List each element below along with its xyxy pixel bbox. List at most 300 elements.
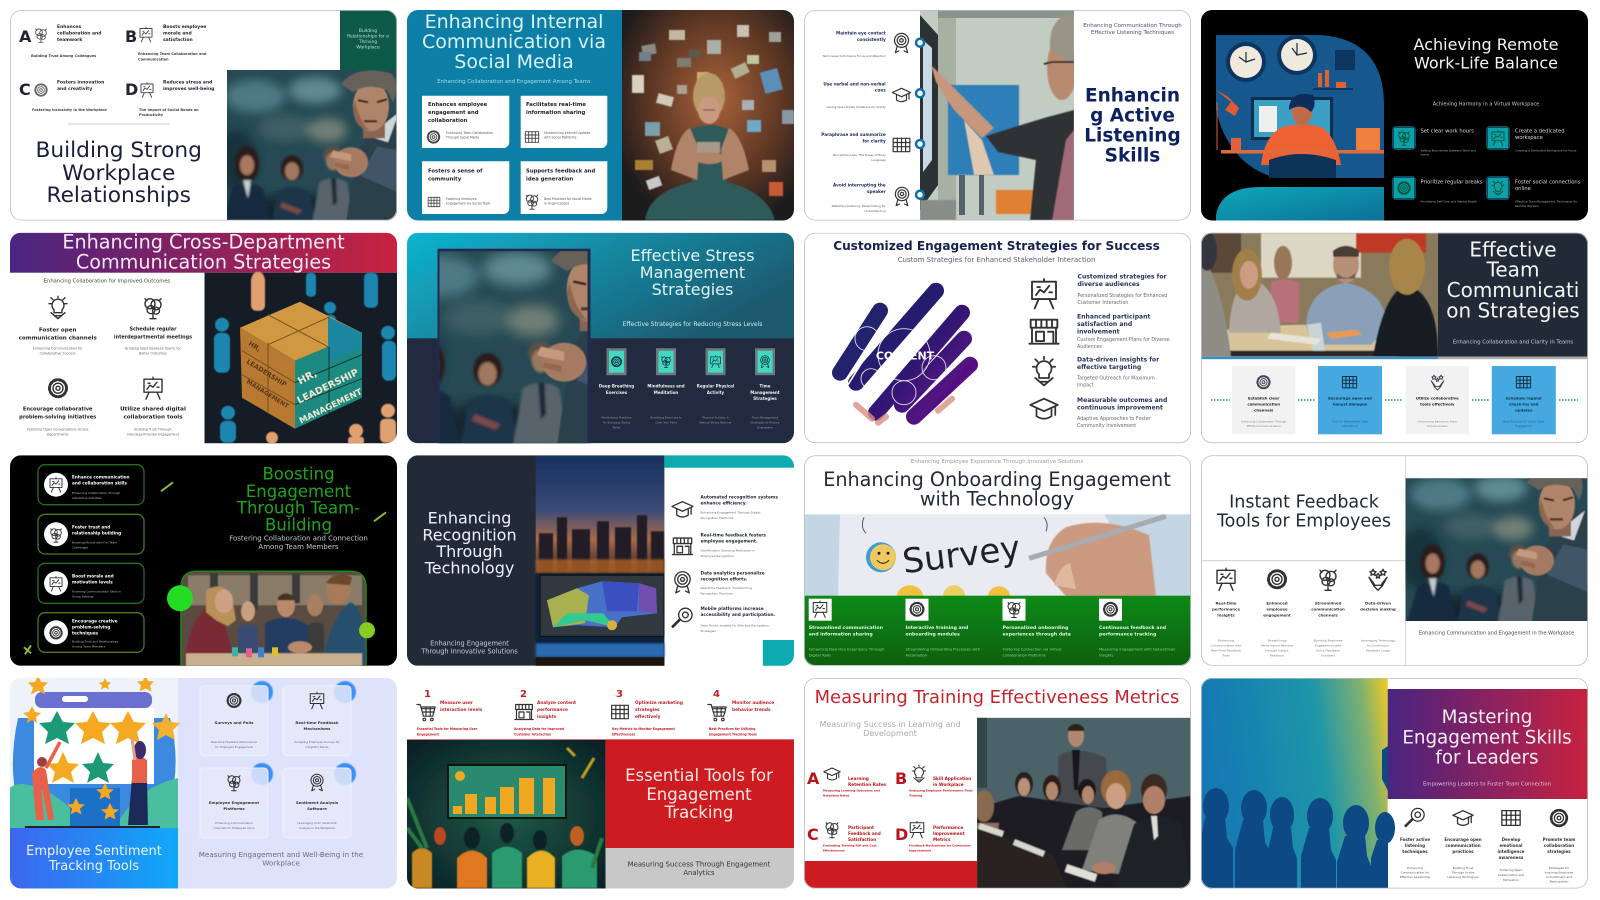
- title: Team: [1486, 258, 1539, 282]
- step 1: consistently: [857, 37, 886, 42]
- item: regular meetings: interdepartmental meetings: [114, 335, 192, 341]
- metric B: Training: [909, 794, 922, 798]
- metric 4: Engagement Tracking Tools: [709, 732, 757, 736]
- panel: Enhancing Active Listening Skills: [804, 10, 1191, 221]
- card: real-time feedback: Mechanisms: [303, 726, 331, 731]
- metric 2: [514, 689, 576, 736]
- item B: Boosts employee: [163, 24, 206, 30]
- metric 3: Key Metrics to Monitor Engagement: [612, 727, 675, 731]
- photo: leadership cube and figures: [204, 272, 398, 445]
- strategy: time management: Strategies: [753, 396, 777, 401]
- metric 1: [417, 689, 483, 736]
- item: morale: [38, 563, 144, 603]
- item: automated recognition: Recognition Platforms: [700, 516, 734, 520]
- metric 3: Optimize marketing: [635, 700, 683, 706]
- item: automated recognition: Enhancing Engagement Through Digital: [700, 510, 761, 514]
- metric 1: 1: [424, 689, 431, 700]
- metric 1: Engagement: [417, 732, 439, 736]
- item: social connections: Foster social connections: [1515, 180, 1581, 186]
- item A: A: [19, 27, 32, 46]
- metric C: C: [807, 825, 819, 844]
- item: participant satisfaction: involvement: [1077, 329, 1120, 336]
- step 3: for clarity: [862, 138, 886, 143]
- green tag: [340, 10, 397, 70]
- item: shared digital tools: Utilize shared digital: [120, 407, 186, 413]
- item: data analytics: [675, 570, 765, 595]
- subtitle: Workplace: [262, 858, 300, 868]
- item: problem solving: problem-solving: [72, 624, 110, 629]
- panel: Mastering Engagement Skills for Leaders: [1199, 678, 1588, 889]
- item: mobile platforms: Strategies: [700, 629, 716, 633]
- title: Building: [265, 515, 332, 534]
- column: streamlined communication: and information sharing: [809, 631, 873, 637]
- photo: leadership cube and figures: LEADERSHIP: [245, 358, 288, 389]
- strategy: breathing: Relief: [613, 426, 621, 430]
- item: social connections: Remote Workers: [1515, 204, 1539, 208]
- item: regular meetings: Schedule regular: [130, 327, 177, 333]
- skill: emotional intelligence: Fostering Team: [1500, 868, 1522, 872]
- decorative green dashes: [24, 482, 386, 654]
- column: continuous feedback: Insights: [1099, 653, 1113, 657]
- metric B: [895, 765, 974, 798]
- panel: Employee Sentiment Tracking Tools: [10, 675, 397, 889]
- item: automated recognition: [672, 494, 778, 520]
- item: shared digital tools: Building Trust Through: [134, 428, 172, 432]
- item: problem solving: Among Team Members: [72, 644, 106, 648]
- step box 3: Utilize collaborative: [1416, 396, 1459, 401]
- item: data analytics: Data analytics personalize: [700, 570, 765, 576]
- teal shape: [1216, 187, 1384, 221]
- card: sentiment analysis: Analysis in the Workplace: [299, 826, 335, 830]
- photo: leadership cube and figures: HR,: [247, 340, 262, 353]
- column: employee engagement: through Instant: [1265, 648, 1289, 652]
- metric A: Retention Rates: [823, 794, 850, 798]
- item: shared digital tools: collaboration tools: [123, 415, 183, 421]
- strategy: breathing: Mindfulness Practices: [601, 416, 632, 420]
- metric 2: Analyze content: [537, 700, 576, 706]
- subtitle: Development: [863, 729, 917, 738]
- skill: emotional intelligence: Develop: [1502, 837, 1520, 842]
- green tag: Workplace: [356, 44, 380, 50]
- title: Achieving Remote: [1414, 35, 1558, 54]
- card: sentiment analysis: [283, 768, 351, 838]
- photo: team building: [181, 571, 366, 666]
- item: communication: Enhancing Collaboration Through: [72, 491, 120, 495]
- column: employee engagement: Feedback: [1270, 653, 1284, 657]
- item: mobile platforms: Mobile platforms increase: [700, 606, 764, 612]
- metric D: Improvement: [909, 848, 931, 852]
- subtitle: Effective Strategies for Reducing Stress Levels: [623, 321, 762, 328]
- step box 4: [1492, 366, 1556, 434]
- item: open channels: Foster open: [39, 328, 76, 334]
- metric 3: 3: [616, 689, 623, 700]
- item B: satisfaction: [163, 37, 193, 43]
- item C: [19, 80, 107, 112]
- item: customized strategies: Customer Interaction: [1078, 300, 1128, 306]
- item: participant satisfaction: [1029, 314, 1170, 350]
- subtitle: Measuring Success in Learning and: [819, 720, 961, 729]
- strategy: time management: Time Management: [751, 416, 779, 420]
- item: workspace: workspace: [1515, 135, 1543, 141]
- item B: morale and: [163, 30, 192, 36]
- title: Work-Life Balance: [1414, 54, 1558, 72]
- item D: [125, 80, 214, 117]
- column: streamlined communication: Streamlined communication: [809, 625, 883, 631]
- strategy: mindfulness: Calm Your Mind: [655, 421, 677, 425]
- metric 4: Best Practices for Utilizing: [709, 727, 755, 731]
- item: regular meetings: Bridging Gaps Between Teams for: [125, 347, 182, 351]
- item: work hours: [1392, 126, 1476, 157]
- column: data-driven decisions: Feedback Loops: [1366, 648, 1390, 652]
- item: shared digital tools: Interdepartmental Engagement: [127, 433, 180, 437]
- column: personalized onboarding: Collaboration Platforms: [1002, 653, 1046, 657]
- item: automated recognition: Automated recognition systems: [700, 494, 778, 500]
- purple title panel: [1388, 689, 1588, 799]
- skill: open communication: practices: [1452, 849, 1474, 854]
- title: Relationships: [46, 183, 191, 208]
- skill: active listening: Enhancing: [1407, 866, 1423, 870]
- item: morale: Boost morale and: [72, 573, 114, 578]
- step box 4: Engagement: [1515, 424, 1532, 428]
- metric A: A: [807, 769, 820, 788]
- card: community: community: [428, 176, 462, 182]
- skill: team collaboration: collaboration: [1544, 843, 1574, 848]
- item: collaborative problem solving: [19, 380, 96, 437]
- title: Enhancin: [1085, 86, 1180, 106]
- column: communication channels: Solutions: [1321, 653, 1335, 657]
- step box 4: check-ins and: [1509, 402, 1539, 407]
- header band: [10, 233, 397, 273]
- step box 3: tools effectively: [1420, 402, 1455, 407]
- column: data-driven decisions: for Continuous: [1367, 643, 1389, 647]
- title: Effective: [1469, 238, 1557, 262]
- gradient background with silhouettes: [1199, 678, 1395, 889]
- item C: and creativity: [57, 86, 92, 92]
- metric 4: behavior trends: [732, 707, 771, 713]
- metric 3: effectively: [635, 714, 661, 720]
- subtitle: Measuring Engagement and Well-Being in the: [199, 850, 364, 859]
- title: Enhancing: [428, 508, 511, 527]
- photo: team meeting: [1201, 232, 1438, 357]
- item: breaks: Prioritizing Self-Care and Mental Health: [1420, 200, 1477, 204]
- card: sharing: [521, 96, 607, 148]
- panel: Customized Engagement Strategies for Success: [804, 233, 1191, 443]
- column: personalized onboarding: Personalized onboarding: [1002, 625, 1068, 631]
- item: communication: and collaboration skills: [72, 480, 127, 485]
- strategy: time management: [750, 348, 780, 430]
- skill: active listening: Communication for: [1401, 870, 1430, 874]
- item: measurable outcomes: continuous improvement: [1077, 405, 1163, 412]
- item: communication: Enhance communication: [72, 474, 130, 479]
- step box 1: communication: [1247, 402, 1280, 407]
- strategy: time management: Time: [760, 384, 771, 389]
- photo: woman with tablet among floating images: [622, 10, 794, 220]
- strategy: physical activity: Activity: [707, 390, 725, 395]
- title: on Strategies: [1446, 299, 1580, 323]
- item: social connections: online: [1515, 186, 1531, 192]
- item: collaborative problem solving: Departments: [47, 433, 69, 437]
- title: Communication Strategies: [76, 251, 331, 274]
- title: Instant Feedback: [1229, 492, 1380, 512]
- metric D: Improvement: [933, 831, 965, 836]
- item: trust: Foster trust and: [72, 524, 110, 529]
- item: work hours: Home: [1420, 153, 1429, 157]
- item: participant satisfaction: Enhanced participant: [1077, 314, 1151, 321]
- title: Strategies: [652, 280, 733, 299]
- subtitle: Analytics: [683, 869, 715, 877]
- metric 1: interaction levels: [440, 707, 483, 713]
- column: continuous feedback: Continuous feedback and: [1099, 625, 1166, 631]
- column: performance insights: Tools: [1221, 653, 1230, 657]
- column: streamlined communication: [809, 599, 885, 657]
- step box 1: Establish clear: [1248, 396, 1280, 401]
- skill: open communication: Building Trust: [1453, 866, 1474, 870]
- item: work hours: Set clear work hours: [1420, 129, 1474, 135]
- item: data-driven insights: [1033, 357, 1159, 389]
- item D: Reduces stress and: [163, 80, 212, 86]
- blue title band: [10, 828, 178, 889]
- green tag: Thriving: [358, 39, 377, 45]
- teal corner square: [763, 640, 795, 666]
- blue circles: [251, 681, 356, 785]
- panel: Enhancing Cross-Department Communication Strategies: [10, 231, 398, 445]
- step box 1: [1232, 366, 1295, 434]
- item: regular meetings: Better Outcomes: [139, 352, 167, 356]
- red title panel: [606, 740, 795, 848]
- step 3: [821, 132, 910, 162]
- item: mobile platforms: Data-Driven Insights for Effective Recognition: [700, 623, 769, 627]
- subtitle: Effective Listening Techniques: [1091, 30, 1174, 36]
- skill: team collaboration: Participation: [1550, 880, 1568, 884]
- step 4: Avoid interrupting the: [833, 183, 886, 188]
- item: real-time feedback: Gamification: Boosting Motivation in: [700, 548, 755, 552]
- item: participant satisfaction: satisfaction and: [1077, 321, 1132, 328]
- title: Workplace: [62, 161, 175, 186]
- item: mobile platforms: [672, 606, 776, 633]
- panel: Enhancing Recognition Through Technology: [407, 455, 795, 666]
- item: trust: relationship building: [72, 530, 121, 535]
- connectors: [1211, 399, 1578, 401]
- metric C: [807, 823, 881, 852]
- graphic: diagonal content stripes: CONTENT: [876, 350, 935, 363]
- card: engagement platforms: Channels for Employee Voice: [214, 826, 255, 830]
- column: performance insights: Enhancing: [1218, 638, 1234, 642]
- card: sentiment analysis: Leveraging AI for Sentiment: [297, 821, 338, 825]
- illustration: star ratings and people: [10, 675, 180, 828]
- title: Effective Stress: [630, 246, 755, 265]
- item: communication: [38, 465, 144, 505]
- card: engagement: Enhancing Team Collaboration: [446, 131, 493, 135]
- item: data analytics: Recognition Practices: [700, 591, 733, 595]
- strategy: physical activity: Regular Physical: [697, 384, 735, 389]
- title: Technology: [424, 558, 514, 577]
- item: shared digital tools: [120, 377, 186, 437]
- title: g Active: [1090, 106, 1175, 126]
- card: community: Fostering Employee: [446, 197, 477, 201]
- step box 4: Best Practices for Virtual Team: [1503, 420, 1545, 424]
- column: communication channels: Streamlined: [1315, 600, 1342, 605]
- card: real-time feedback: Insightful Trends: [305, 745, 329, 749]
- skill: team collaboration: Promote team: [1543, 837, 1575, 842]
- strategy: time management: Overwhelm: [757, 426, 773, 430]
- card: feedback: [521, 161, 607, 214]
- column: communication channels: [1311, 570, 1345, 657]
- subtitle: Enhancing Engagement: [430, 639, 509, 647]
- column: streamlined communication: Digital Tools: [809, 653, 831, 657]
- item C: C: [19, 80, 31, 99]
- item: mobile platforms: accessibility and participation.: [700, 612, 776, 618]
- item: measurable outcomes: [1030, 397, 1167, 429]
- step box 4: Schedule regular: [1506, 396, 1542, 401]
- step box 2: Interactions: [1342, 424, 1359, 428]
- step 2: [823, 82, 911, 109]
- item D: improves well-being: [163, 86, 214, 92]
- item: customized strategies: diverse audiences: [1078, 281, 1140, 288]
- photo: leadership cube and figures: MANAGEMENT: [245, 378, 291, 411]
- skill: open communication: [1444, 811, 1482, 879]
- panel: Achieving Remote Work-Life Balance: [1201, 10, 1588, 221]
- column: employee engagement: Enhanced: [1266, 600, 1288, 605]
- item: workspace: Creating a Dedicated Workspace for Focus: [1515, 148, 1577, 152]
- item: measurable outcomes: Adaptive Approaches to Foster: [1077, 416, 1151, 422]
- column: continuous feedback: performance tracking: [1099, 631, 1156, 637]
- title: Through Team-: [236, 498, 360, 517]
- item: real-time feedback: Real-time feedback fosters: [700, 532, 766, 538]
- strategy: breathing: Exercises: [606, 390, 628, 395]
- column: performance insights: insights: [1217, 612, 1235, 617]
- step box 4: updates: [1515, 408, 1533, 413]
- metric 3: [612, 689, 683, 736]
- card: surveys and polls: for Employee Engagement: [215, 745, 254, 749]
- skill: emotional intelligence: Collaboration and: [1498, 873, 1524, 877]
- card: engagement platforms: Employee Engagement: [209, 800, 259, 805]
- subtitle: Custom Strategies for Enhanced Stakeholder Interaction: [898, 256, 1095, 264]
- column: data-driven decisions: Data-driven: [1365, 600, 1391, 605]
- column: performance insights: [1211, 568, 1242, 657]
- illustration: audience watching bar chart: [407, 740, 606, 889]
- title: Boosting: [262, 464, 335, 483]
- card: engagement: Through Social Media: [445, 136, 479, 140]
- item: open channels: Enhancing Communication for: [33, 347, 83, 351]
- column: streamlined communication: Enhancing New Hire Experience Through: [809, 647, 885, 651]
- metric D: [895, 821, 971, 852]
- step box 2: [1318, 366, 1382, 434]
- subtitle: Fostering Collaboration and Connection: [229, 534, 368, 542]
- card: sharing: Facilitates real-time: [526, 102, 586, 108]
- step 4: [832, 183, 909, 213]
- step 4: Understanding: [864, 209, 886, 213]
- item A: Building Trust Among Colleagues: [31, 54, 96, 58]
- item: customized strategies: [1032, 274, 1167, 308]
- step box 3: Overcoming Barriers to Team: [1418, 420, 1457, 424]
- metric 2: insights: [537, 714, 557, 720]
- card: community: [422, 161, 509, 214]
- strategy: time management: Strategies to Reduce: [750, 421, 780, 425]
- column: interactive training: Automation: [906, 653, 928, 657]
- skill: team collaboration: [1543, 810, 1575, 884]
- step box 3: Communication: [1427, 424, 1448, 428]
- title: Listening: [1084, 126, 1181, 146]
- subtitle: Enhancing Communication Through: [1083, 23, 1182, 29]
- column: personalized onboarding: [1002, 599, 1071, 657]
- item D: D: [125, 80, 138, 99]
- title: Tracking: [664, 803, 733, 822]
- step 2: Use verbal and non-verbal: [823, 82, 886, 86]
- graphic: diagonal content stripes: [840, 291, 970, 423]
- item: collaborative problem solving: Fostering Open Conversations Across: [27, 428, 89, 432]
- subtitle: Measuring Success Through Engagement: [628, 860, 771, 868]
- column: communication channels: channels: [1318, 612, 1338, 617]
- item: regular meetings: [114, 299, 192, 356]
- item: customized strategies: Personalized Strategies for Enhanced: [1078, 293, 1167, 299]
- metric C: Satisfaction: [848, 837, 876, 842]
- panel: Building Strong Workplace Relationships: [10, 10, 397, 220]
- caption: Enhancing Communication and Engagement in the Workplace: [1419, 630, 1574, 636]
- item D: The Impact of Social Bonds on: [139, 108, 199, 112]
- green tag: Building: [359, 28, 377, 34]
- item: open channels: [19, 296, 97, 356]
- card: engagement platforms: Enhancing Communication: [215, 821, 253, 825]
- photo: survey and pen: Survey: [900, 528, 1022, 582]
- step 3: Language: [871, 158, 886, 162]
- title: Tools for Employees: [1216, 511, 1391, 531]
- metric 3: strategies: [635, 707, 660, 713]
- item: workspace: Create a dedicated: [1515, 129, 1564, 135]
- strategy: breathing: [599, 348, 634, 430]
- column: data-driven decisions: Leveraging Technology: [1361, 638, 1395, 642]
- title: Employee Sentiment: [26, 844, 162, 859]
- subtitle: Enhancing Collaboration for Improved Outcomes: [44, 279, 171, 285]
- item C: Fostering Inclusivity in the Workplace: [32, 108, 107, 112]
- step box 2: honest dialogue: [1333, 402, 1368, 407]
- title: Enhancing Internal: [425, 11, 603, 33]
- card: surveys and polls: Real-time Feedback Mechanisms: [211, 740, 257, 744]
- teal top bar: [664, 455, 794, 468]
- item: participant satisfaction: Audiences: [1077, 344, 1102, 350]
- panel: Essential Tools for Engagement Tracking: [407, 678, 795, 889]
- column: personalized onboarding: experiences through data: [1002, 631, 1071, 637]
- item A: collaboration and: [57, 30, 101, 36]
- metric C: Effectiveness: [823, 848, 845, 852]
- panel: Measuring Training Effectiveness Metrics: [804, 678, 1191, 889]
- item: communication: Interactive Activities: [72, 496, 102, 500]
- item: measurable outcomes: Community Involvement: [1077, 423, 1136, 429]
- column: employee engagement: Performance Reviews: [1261, 643, 1294, 647]
- item C: Fosters innovation: [57, 80, 104, 86]
- strategy: mindfulness: Breathing Exercises to: [650, 416, 682, 420]
- item: social connections: Effective Time Management Techniques for: [1515, 200, 1578, 204]
- metric 4: 4: [713, 689, 720, 700]
- metric 4: Monitor audience: [732, 700, 774, 706]
- item D: Productivity: [139, 113, 164, 117]
- item: social connections: [1486, 176, 1581, 208]
- column: performance insights: Real-Time Feedback: [1211, 648, 1241, 652]
- strategy: physical activity: [697, 348, 735, 425]
- item: problem solving: techniques: [72, 630, 99, 635]
- item: data-driven insights: Data-driven insights for: [1077, 357, 1159, 364]
- metric 2: Customer Interaction: [514, 732, 551, 736]
- item: real-time feedback: employee engagement.: [700, 538, 758, 544]
- item: data analytics: Real-Time Feedback: Transforming: [700, 586, 752, 590]
- metric A: Measuring Learning Outcomes and: [823, 788, 880, 792]
- title: with Technology: [920, 487, 1074, 510]
- item B: [125, 24, 207, 62]
- strategy: mindfulness: Meditation: [654, 390, 678, 395]
- panel: Enhancing Onboarding Engagement with Technology: [804, 455, 1191, 666]
- item B: Enhancing Team Collaboration and: [138, 52, 207, 56]
- metric C: Feedback and: [848, 831, 881, 836]
- column: employee engagement: engagement: [1263, 612, 1291, 617]
